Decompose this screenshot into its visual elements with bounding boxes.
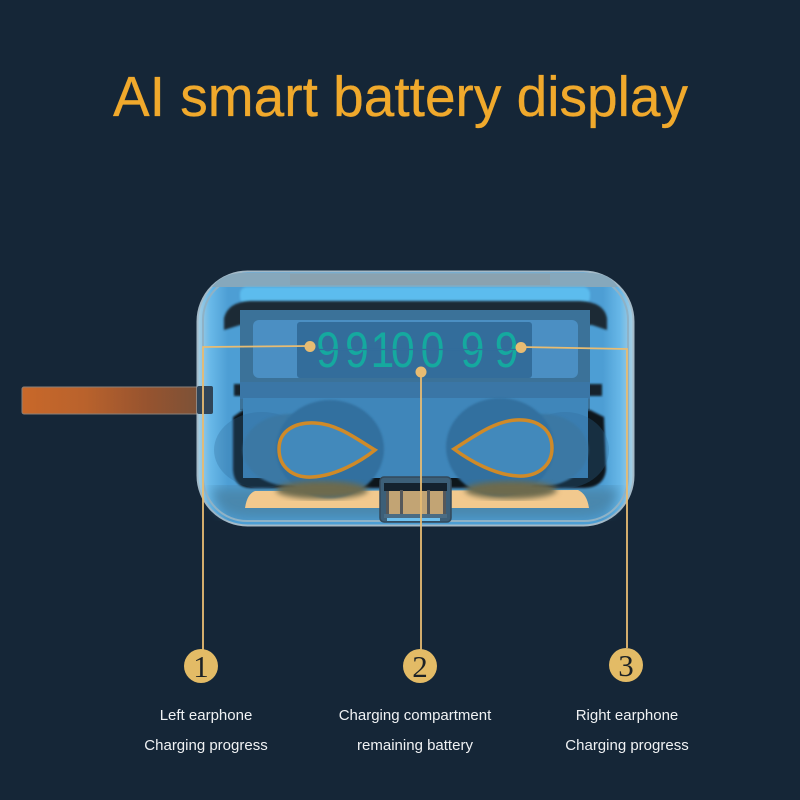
digit readout: 0: [391, 322, 415, 378]
strap end overlapping the case: [197, 386, 213, 414]
cavity upper panel: [240, 310, 590, 410]
left callout line: [203, 346, 310, 650]
digit readout: [316, 322, 518, 378]
digit readout: 0: [421, 322, 444, 378]
right callout line: [521, 347, 627, 648]
segment gaps in digits: [312, 348, 520, 350]
display screen: [297, 322, 532, 378]
badge 3: [609, 648, 643, 683]
label: right earphone: [565, 707, 689, 754]
digit readout: 9: [345, 322, 369, 378]
label: charging compartment: remaining battery: [357, 737, 473, 754]
case inner rim: [203, 276, 628, 521]
label: left earphone: Charging progress: [144, 737, 268, 754]
top rim inset: [290, 274, 550, 285]
right earbud well: [446, 398, 609, 499]
right earbud teardrop outline: [454, 420, 552, 476]
digit readout: 9: [316, 322, 340, 378]
cream bar: [245, 490, 589, 508]
center connector: [380, 477, 451, 522]
label: left earphone: [144, 707, 268, 754]
case shell: [198, 272, 634, 526]
dark side notch right: [588, 384, 602, 396]
lower dark cavity: [233, 410, 606, 488]
title: AI smart battery display: [113, 65, 688, 129]
strap: orange pull tab: [22, 387, 202, 414]
display surround: [253, 320, 578, 378]
left earbud teardrop outline: [279, 423, 375, 477]
label: right earphone: Right earphone: [576, 707, 678, 724]
center callout line: [420, 372, 422, 650]
dark inner cavity: [224, 301, 607, 330]
badge 2: [403, 649, 437, 684]
top cyan light bar: [240, 287, 590, 304]
lower cavity panel: [243, 398, 588, 478]
left earbud well: [214, 400, 384, 499]
badge 2: 2: [412, 649, 428, 684]
label: right earphone: Charging progress: [565, 737, 689, 754]
badge 1: [184, 649, 218, 684]
dark side notch left: [234, 384, 248, 396]
digit readout: 9: [461, 322, 484, 378]
band under display: [240, 382, 590, 399]
badge 1: 1: [193, 649, 209, 684]
badge 3: 3: [618, 648, 634, 683]
charging case: [198, 272, 634, 526]
lower shell shading: [212, 488, 618, 518]
callout lines: [203, 346, 627, 650]
label: charging compartment: Charging compartment: [339, 707, 492, 724]
label: left earphone: Left earphone: [160, 707, 252, 724]
callout dot left: [304, 341, 316, 352]
callout dot right: [516, 342, 526, 353]
top rim band: [212, 273, 618, 287]
digit readout: 9: [495, 322, 518, 378]
digit readout: 1: [371, 322, 394, 378]
callout dot center: [416, 366, 426, 378]
label: charging compartment: [339, 707, 492, 754]
